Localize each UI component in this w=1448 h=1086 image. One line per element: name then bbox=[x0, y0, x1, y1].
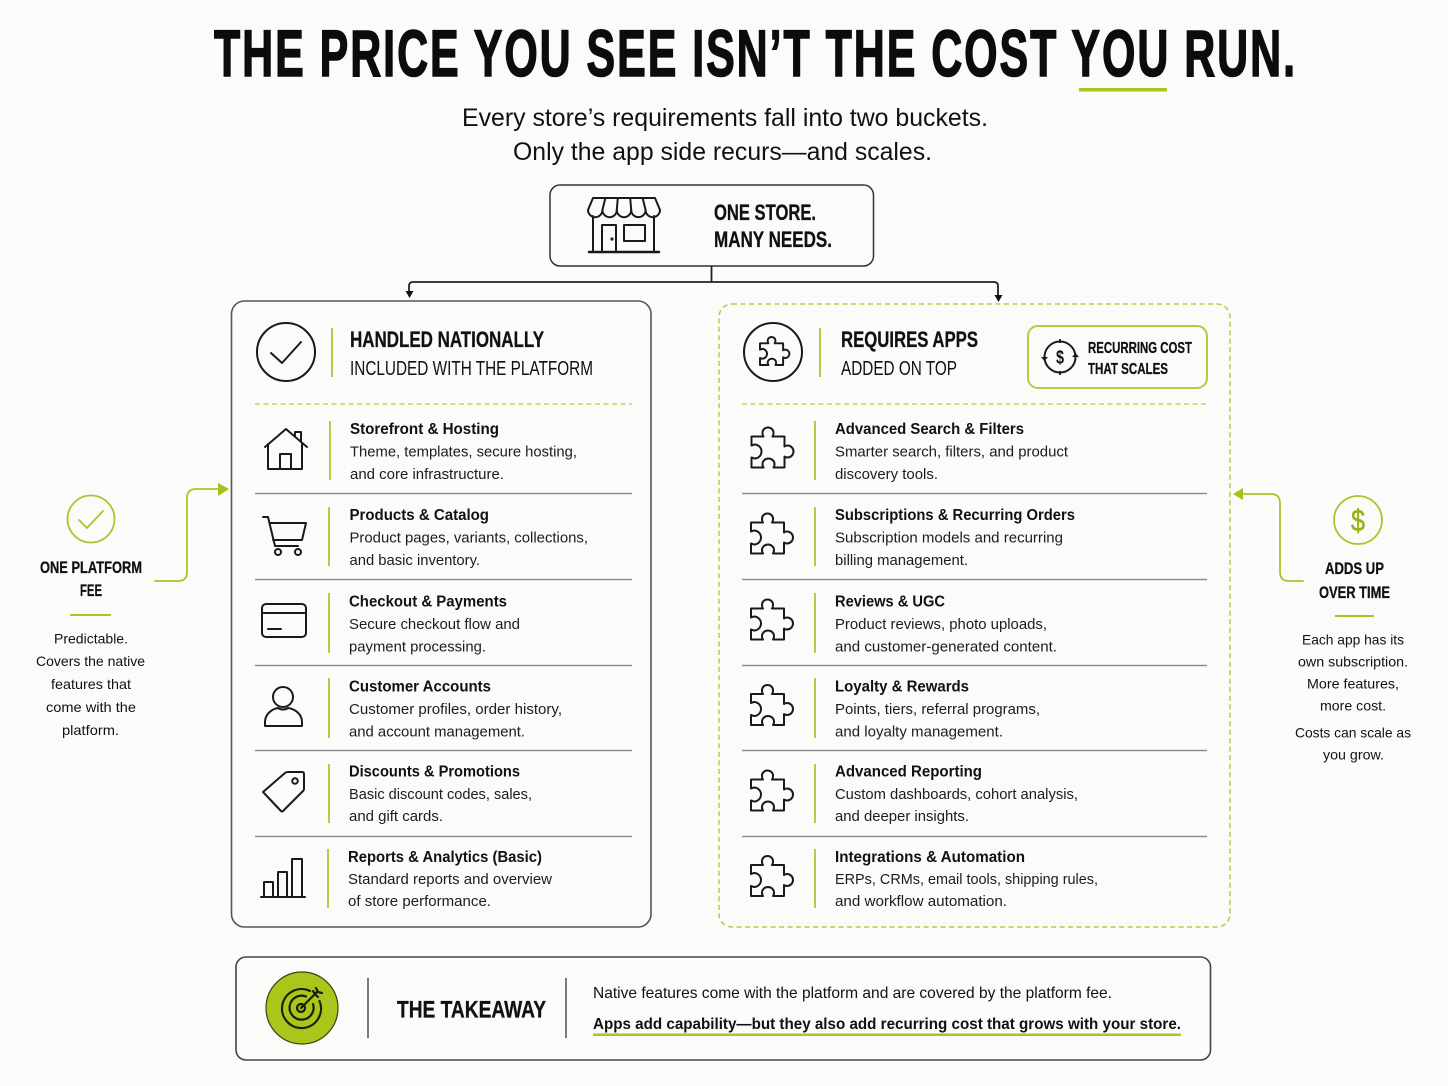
row: checkout and payments: Secure checkout flow and bbox=[349, 616, 520, 633]
row: reviews and ugc: Product reviews, photo uploads, bbox=[835, 616, 1047, 633]
row: integrations and automation: and workflow automation. bbox=[835, 893, 1007, 910]
row: storefront and hosting: and core infrastructure. bbox=[350, 466, 504, 483]
panel: one store many needs bbox=[550, 185, 874, 266]
icon: dollar cycle bbox=[1041, 339, 1079, 375]
callout: one platform fee: ONE PLATFORM bbox=[40, 558, 142, 577]
row: reports and analytics bbox=[261, 849, 552, 910]
callout body text bbox=[36, 630, 145, 738]
row: advanced reporting: Advanced Reporting bbox=[835, 764, 982, 780]
panel: the takeaway bbox=[236, 957, 1210, 1060]
row: loyalty and rewards bbox=[751, 678, 1040, 740]
callout body text: Covers the native bbox=[36, 653, 145, 669]
row: discounts and promotions: and gift cards. bbox=[349, 808, 443, 825]
subtitle bbox=[462, 104, 988, 166]
row: customer accounts: Customer Accounts bbox=[349, 678, 491, 696]
row: subscriptions and recurring orders: billing management. bbox=[835, 552, 968, 569]
badge: recurring cost: THAT SCALES bbox=[1088, 361, 1168, 378]
callout body text: features that bbox=[51, 676, 131, 692]
callout body text: more cost. bbox=[1320, 698, 1386, 714]
row: reports and analytics: Reports & Analytics (Basic) bbox=[348, 849, 542, 866]
icon: cart bbox=[263, 517, 306, 555]
store label: MANY NEEDS. bbox=[714, 227, 832, 252]
row: checkout and payments: Checkout & Payments bbox=[349, 594, 507, 610]
callout: adds up over time: ADDS UP bbox=[1325, 559, 1384, 578]
badge: recurring cost: RECURRING COST bbox=[1088, 340, 1192, 357]
takeaway text: Native features come with the platform and are covered by the platform fee. bbox=[593, 985, 1112, 1002]
row: storefront and hosting bbox=[265, 421, 577, 483]
row: discounts and promotions: Basic discount codes, sales, bbox=[349, 786, 532, 803]
row: advanced reporting: Custom dashboards, cohort analysis, bbox=[835, 786, 1078, 803]
connector arrows bbox=[406, 266, 1002, 302]
row: reviews and ugc: Reviews & UGC bbox=[835, 594, 945, 610]
row: advanced reporting: and deeper insights. bbox=[835, 808, 969, 825]
row: advanced search and filters: discovery tools. bbox=[835, 466, 938, 483]
row: storefront and hosting: Storefront & Hosting bbox=[350, 421, 499, 438]
row: reports and analytics: of store performance. bbox=[348, 893, 491, 910]
callout body text: you grow. bbox=[1323, 746, 1384, 762]
icon: green dollar circle: $ bbox=[1351, 503, 1365, 538]
icon: puzzle piece bbox=[752, 428, 794, 468]
row: checkout and payments: payment processing. bbox=[349, 638, 486, 656]
row: advanced search and filters bbox=[752, 421, 1069, 483]
callout body text: Predictable. bbox=[54, 630, 128, 646]
icon: person bbox=[265, 687, 302, 726]
icon: puzzle circle bbox=[744, 323, 802, 381]
row: advanced search and filters: Advanced Search & Filters bbox=[835, 421, 1024, 438]
callout body text: Costs can scale as bbox=[1295, 724, 1411, 740]
row: products and catalog: Product pages, variants, collections, bbox=[350, 530, 588, 546]
row: customer accounts bbox=[265, 678, 562, 740]
heading: handled nationally: INCLUDED WITH THE PLATFORM bbox=[350, 358, 593, 380]
heading: handled nationally: HANDLED NATIONALLY bbox=[350, 327, 544, 352]
row: reviews and ugc: and customer-generated content. bbox=[835, 638, 1057, 656]
panel: handled nationally bbox=[232, 301, 651, 927]
icon: target bbox=[266, 972, 338, 1044]
subtitle: Every store’s requirements fall into two buckets. bbox=[462, 104, 988, 132]
icon: puzzle piece bbox=[751, 856, 793, 896]
callout body text: own subscription. bbox=[1298, 654, 1408, 670]
callout: one platform fee: FEE bbox=[80, 581, 102, 600]
row: integrations and automation bbox=[751, 849, 1098, 910]
icon: bar chart bbox=[261, 859, 305, 897]
callout: one platform fee bbox=[36, 496, 145, 738]
row: discounts and promotions bbox=[263, 764, 532, 825]
row: products and catalog bbox=[263, 507, 588, 569]
callout body text: Each app has its bbox=[1302, 632, 1404, 648]
heading: requires apps bbox=[841, 327, 978, 380]
takeaway text: Apps add capability—but they also add recurring cost that grows with your store. bbox=[593, 1016, 1181, 1033]
arrow: adds up to apps panel bbox=[1233, 488, 1303, 581]
callout body text: More features, bbox=[1307, 676, 1399, 692]
icon: tag bbox=[263, 772, 304, 812]
row: loyalty and rewards: Loyalty & Rewards bbox=[835, 678, 969, 696]
icon: puzzle piece bbox=[751, 770, 793, 810]
row: advanced reporting bbox=[751, 764, 1078, 825]
callout body text: come with the bbox=[46, 699, 136, 715]
arrow: fee to native panel bbox=[155, 483, 229, 581]
heading: the takeaway: THE TAKEAWAY bbox=[397, 996, 546, 1024]
row: checkout and payments bbox=[262, 593, 520, 656]
row: integrations and automation: Integrations & Automation bbox=[835, 849, 1025, 866]
heading: handled nationally bbox=[350, 327, 593, 380]
icon: puzzle piece bbox=[751, 514, 793, 554]
icon: credit card bbox=[262, 604, 306, 637]
row: subscriptions and recurring orders: Subscription models and recurring bbox=[835, 530, 1063, 546]
store label: ONE STORE. bbox=[714, 200, 816, 225]
takeaway text bbox=[593, 985, 1181, 1036]
callout: adds up over time bbox=[1295, 496, 1411, 762]
subtitle: Only the app side recurs—and scales. bbox=[513, 138, 932, 166]
icon: storefront bbox=[588, 198, 660, 252]
callout body text bbox=[1295, 632, 1411, 762]
row: products and catalog: Products & Catalog bbox=[350, 507, 489, 524]
heading: requires apps: ADDED ON TOP bbox=[841, 358, 957, 380]
icon: check circle bbox=[257, 323, 315, 381]
icon: dollar cycle: $ bbox=[1056, 348, 1064, 368]
row: reviews and ugc bbox=[751, 593, 1057, 656]
row: subscriptions and recurring orders: Subscriptions & Recurring Orders bbox=[835, 507, 1075, 524]
callout body text: platform. bbox=[62, 722, 119, 738]
row: advanced search and filters: Smarter search, filters, and product bbox=[835, 444, 1069, 460]
badge: recurring cost bbox=[1028, 326, 1207, 388]
icon: house bbox=[265, 429, 307, 469]
row: subscriptions and recurring orders bbox=[751, 507, 1075, 569]
panel: requires apps bbox=[719, 304, 1230, 927]
row: loyalty and rewards: Points, tiers, referral programs, bbox=[835, 701, 1040, 718]
row: integrations and automation: ERPs, CRMs, email tools, shipping rules, bbox=[835, 871, 1098, 888]
store label bbox=[714, 200, 832, 252]
row: customer accounts: Customer profiles, order history, bbox=[349, 701, 562, 718]
icon: green check circle bbox=[68, 496, 114, 542]
row: customer accounts: and account management. bbox=[349, 724, 525, 740]
row: discounts and promotions: Discounts & Promotions bbox=[349, 764, 520, 780]
row: loyalty and rewards: and loyalty management. bbox=[835, 724, 1003, 740]
callout: adds up over time: OVER TIME bbox=[1319, 583, 1390, 602]
row: reports and analytics: Standard reports and overview bbox=[348, 871, 552, 888]
row: products and catalog: and basic inventory. bbox=[350, 552, 480, 569]
icon: green dollar circle bbox=[1334, 496, 1382, 544]
row: storefront and hosting: Theme, templates, secure hosting, bbox=[350, 444, 577, 460]
icon: puzzle piece bbox=[751, 600, 793, 640]
icon: puzzle piece bbox=[751, 685, 793, 725]
heading: requires apps: REQUIRES APPS bbox=[841, 327, 978, 352]
